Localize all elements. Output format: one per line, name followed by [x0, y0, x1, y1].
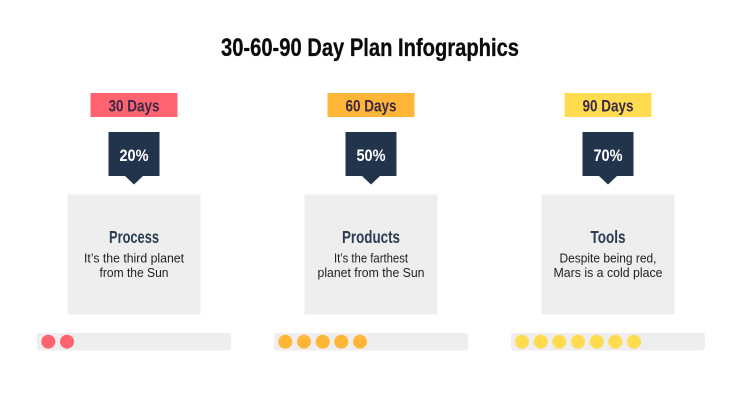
70% callout [582, 132, 634, 184]
products card [304, 194, 438, 314]
panel: 90 days [511, 93, 705, 350]
progress bar: 2 dots [37, 333, 231, 350]
title: 30-60-90 Day Plan Infographics [221, 34, 519, 62]
panel: 60 days [274, 93, 468, 350]
60 days label: 60 Days [346, 96, 396, 116]
process card: It’s the third planet [84, 250, 184, 266]
process card: Process [109, 227, 159, 247]
70% callout: 70% [594, 146, 622, 165]
30 days label: 30 Days [108, 96, 160, 116]
progress bar: 5 dots [274, 333, 468, 350]
20% callout: 20% [120, 146, 148, 165]
products card: It’s the farthest [334, 250, 408, 266]
process card: from the Sun [100, 265, 168, 280]
products card: Products [342, 227, 400, 247]
20% callout [108, 132, 160, 184]
panel: 30 days [37, 93, 231, 350]
products card: planet from the Sun [318, 265, 424, 280]
30 days label [90, 93, 178, 117]
progress bar: 7 dots [511, 333, 705, 350]
90 days label: 90 Days [582, 96, 634, 116]
50% callout: 50% [356, 146, 386, 165]
process card [68, 194, 200, 314]
60 days label [328, 93, 414, 117]
tools card: Despite being red, [560, 250, 656, 266]
90 days label [564, 93, 652, 117]
50% callout [346, 132, 396, 184]
tools card: Tools [590, 227, 626, 247]
tools card: Mars is a cold place [554, 265, 662, 280]
tools card [542, 194, 674, 314]
